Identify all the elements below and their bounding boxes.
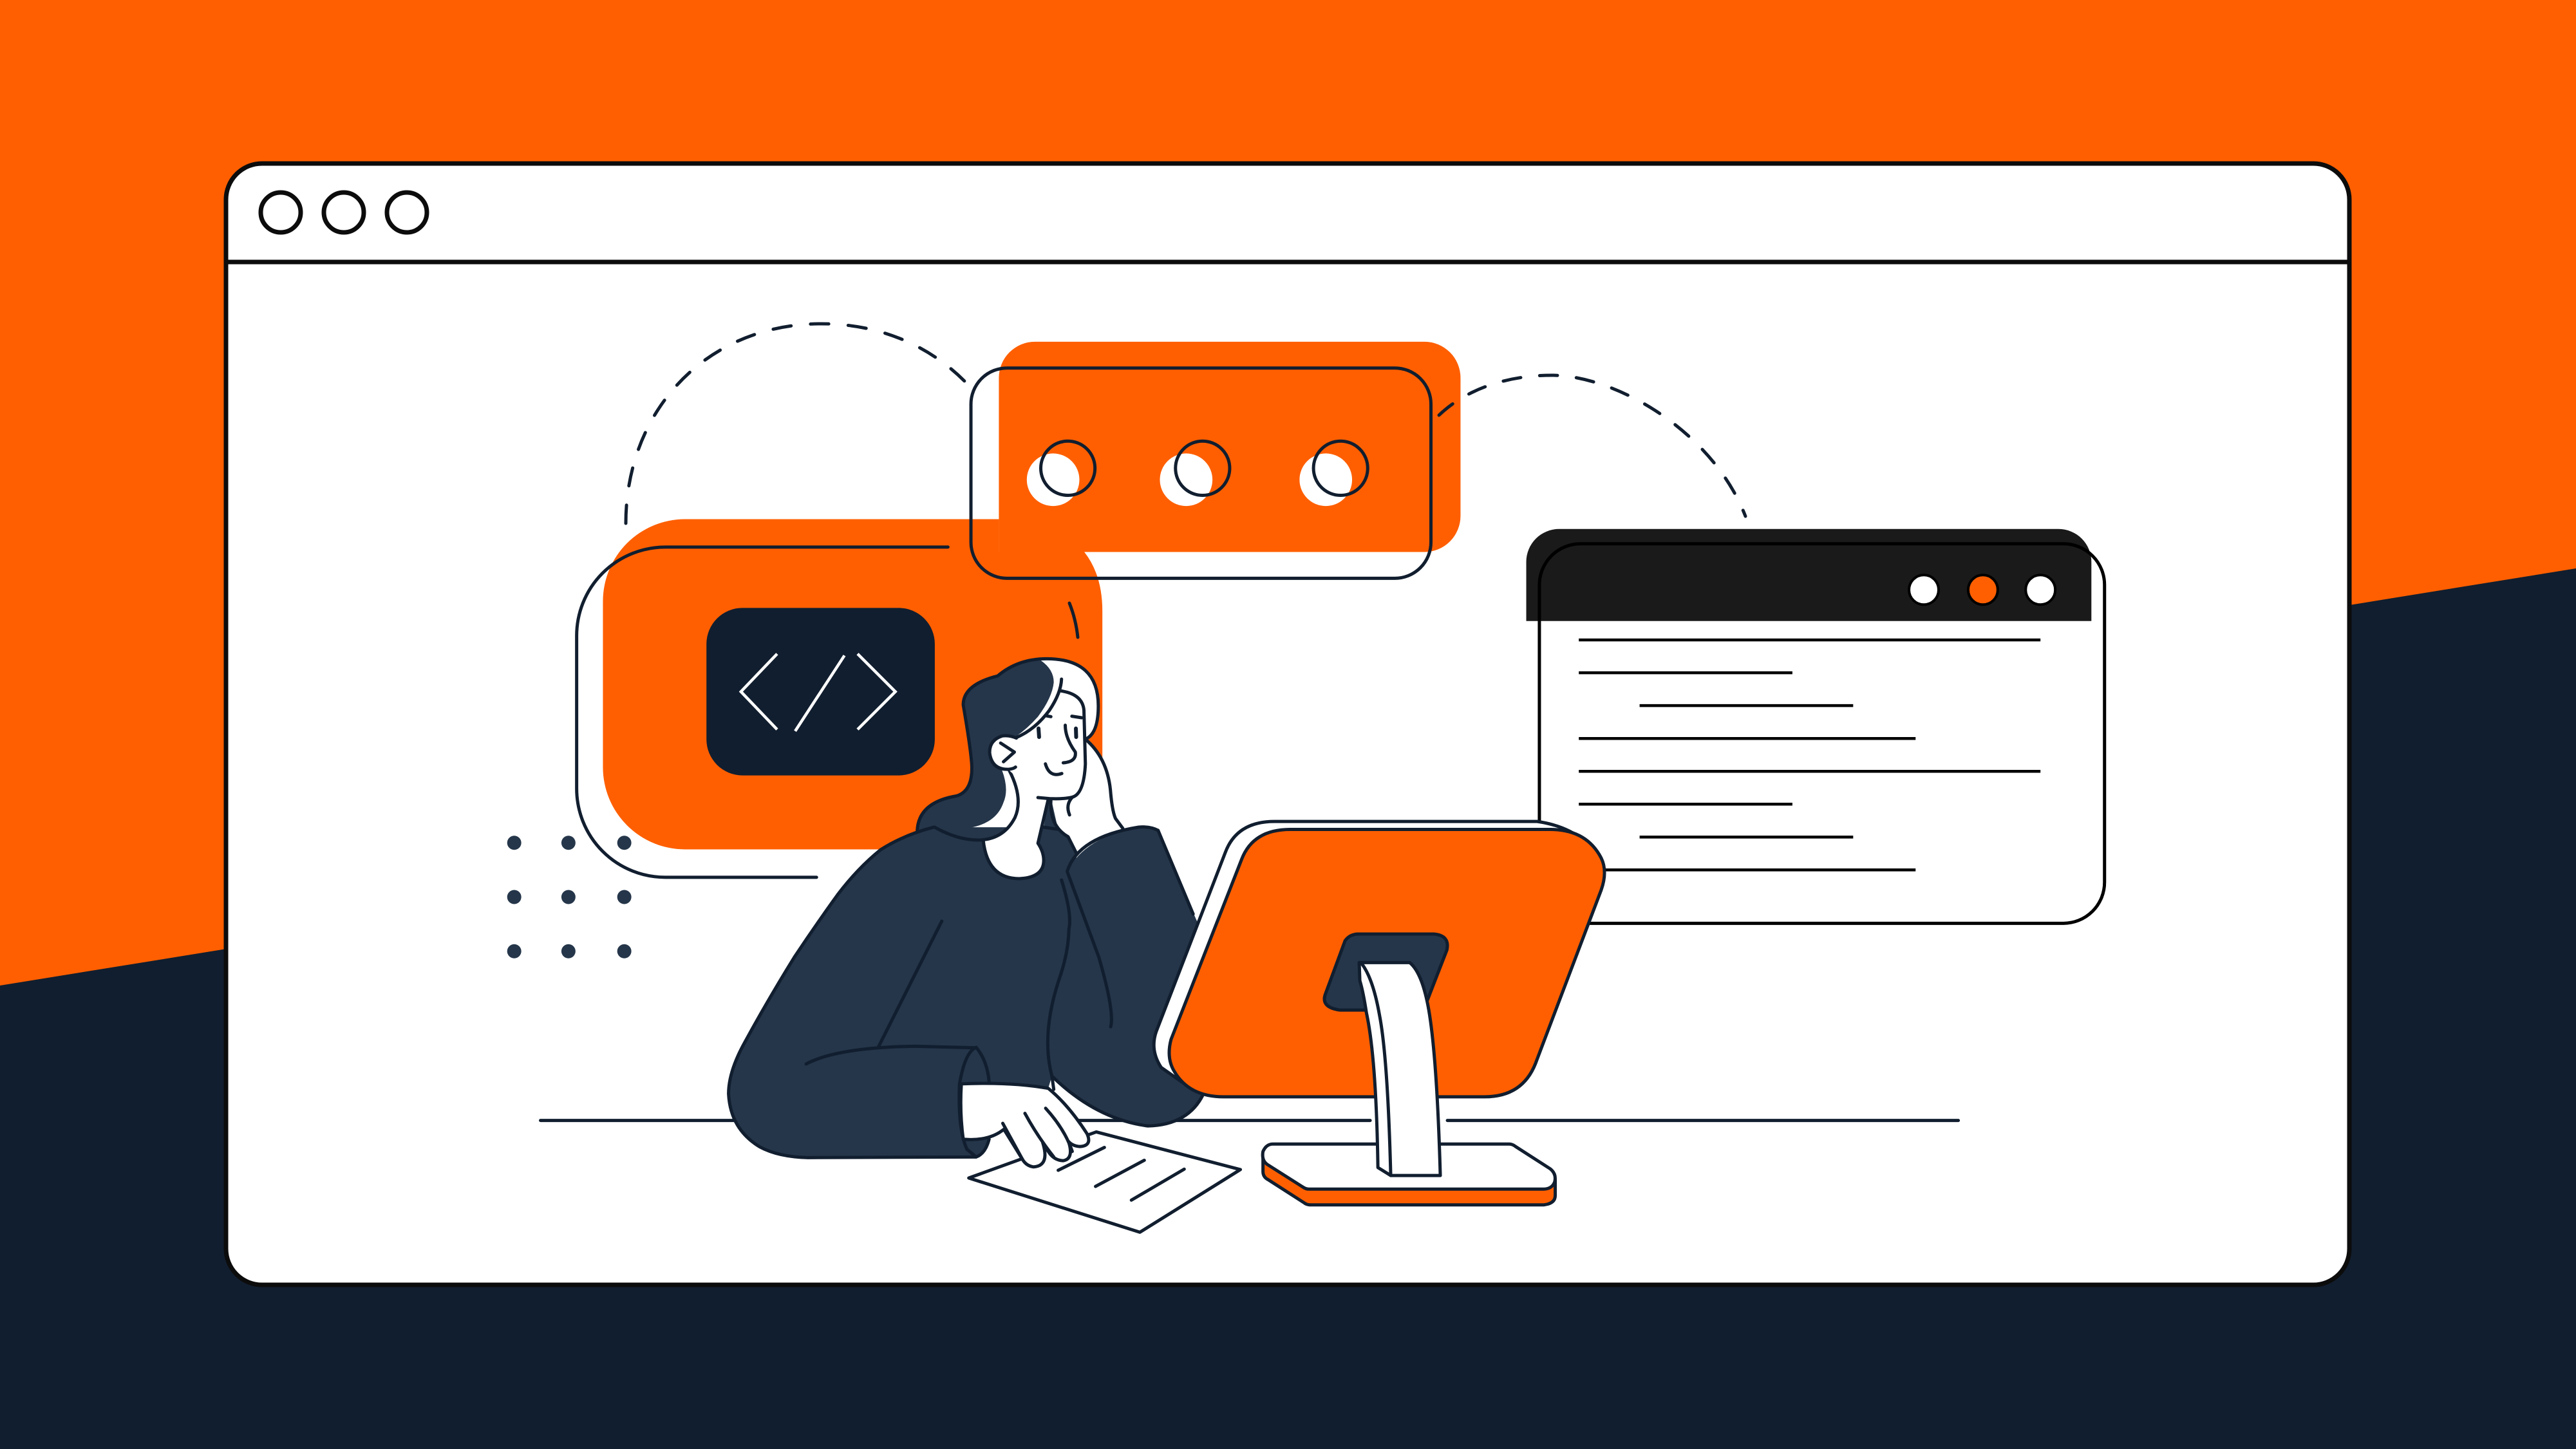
- panel: code block orange shape: [603, 519, 1102, 849]
- finger lines: [1002, 1108, 1072, 1159]
- mouth: [1046, 764, 1062, 774]
- monitor stand inner edge: [1362, 964, 1391, 1175]
- editor code lines: [1579, 640, 2040, 870]
- editor dark header: [1527, 529, 2091, 621]
- torso fill: [729, 827, 1078, 1157]
- hand shape: [961, 1083, 1089, 1167]
- eyebrows: [1045, 716, 1082, 718]
- torso fold lines: [806, 872, 1111, 1089]
- monitor base top: [1263, 1144, 1555, 1189]
- paper: [969, 1132, 1241, 1232]
- sleeve edge: [959, 1047, 976, 1149]
- speech bubble dots: [1027, 441, 1368, 506]
- scene in display coordinates: [507, 342, 2105, 1121]
- hair strand: [1068, 797, 1073, 815]
- panel: speech bubble orange shape: [999, 342, 1460, 552]
- dot grid: [507, 836, 632, 958]
- window control buttons: [261, 192, 427, 232]
- dashed connector arcs: [626, 324, 1745, 637]
- right arm lower outline: [1052, 1076, 1203, 1126]
- icon: code brackets: [706, 608, 935, 776]
- person: [729, 659, 1241, 1232]
- head: [934, 679, 1193, 914]
- neck and collar: [983, 771, 1073, 879]
- code icon glyph: [741, 654, 896, 731]
- editor white body: [1539, 544, 2105, 923]
- browser window: [226, 164, 2349, 1285]
- inner ear: [1001, 743, 1015, 762]
- monitor base side: [1263, 1157, 1556, 1205]
- hair outline: [917, 659, 1123, 830]
- editor outline: [1539, 544, 2105, 923]
- dark hair: [917, 660, 1054, 832]
- paper lines: [1058, 1148, 1184, 1200]
- long hair white base: [917, 659, 1127, 858]
- nose: [1063, 725, 1075, 763]
- hair back and head: [917, 659, 1127, 858]
- ear: [990, 736, 1017, 769]
- raised arm outline: [1067, 827, 1193, 914]
- right arm: [1052, 827, 1226, 1126]
- hair bang line: [1017, 679, 1062, 738]
- face: [1009, 691, 1086, 799]
- paper sheet: [969, 1132, 1241, 1232]
- monitor mount recess: [1324, 934, 1447, 1010]
- torso and left arm: [729, 827, 1241, 1232]
- monitor orange casing: [1169, 830, 1604, 1097]
- window title bar divider: [226, 260, 2349, 264]
- speech bubble outline: [971, 368, 1431, 578]
- code block outline: [577, 547, 948, 877]
- code icon tile: [706, 608, 935, 776]
- left arm outline: [729, 827, 976, 1157]
- face outline: [1038, 691, 1086, 799]
- neck shadow wedge: [1044, 800, 1058, 829]
- background: navy diagonal band: [0, 568, 2576, 1449]
- monitor back panel: [1154, 821, 1603, 1085]
- panel: code editor window: [1527, 529, 2105, 923]
- desk line: [541, 1119, 1959, 1122]
- editor header buttons: [1909, 575, 2055, 604]
- neck collar outline: [934, 771, 1076, 879]
- sleeve opening: [967, 1047, 989, 1157]
- icon: hand: [961, 1083, 1089, 1167]
- monitor: [1154, 821, 1604, 1205]
- window frame: [226, 164, 2349, 1285]
- monitor stand: [1359, 962, 1440, 1175]
- eyes: [1039, 729, 1076, 737]
